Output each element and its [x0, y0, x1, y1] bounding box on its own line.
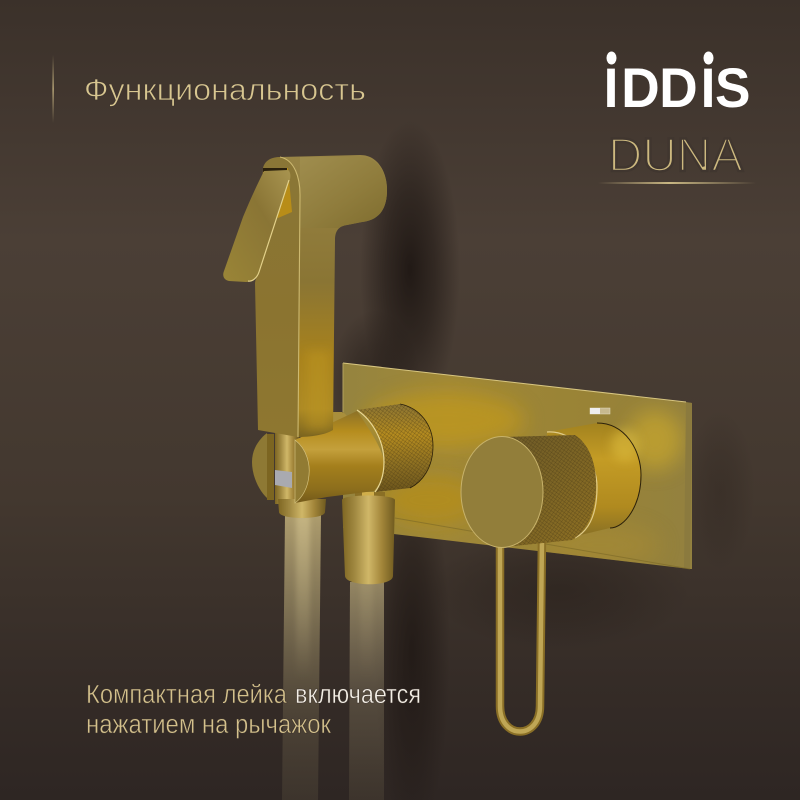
loop lever [500, 537, 542, 732]
shadows on wall [330, 120, 755, 800]
divider line left of heading [52, 55, 54, 123]
caption: включается [295, 681, 421, 709]
silver band [275, 470, 292, 488]
handset [223, 150, 395, 437]
holder body [295, 411, 384, 503]
product name: DUNA: DUNA [608, 128, 744, 181]
caption: нажатием на рычажок [86, 711, 332, 739]
handset side and head [280, 150, 395, 437]
holder knurled collar [357, 404, 433, 492]
right half disc [295, 440, 309, 503]
knob end disc [461, 436, 543, 548]
hose nut: left [278, 499, 326, 518]
holder stem [275, 432, 299, 504]
caption [86, 681, 421, 739]
mixer base cylinder [547, 423, 641, 543]
holder ring behind handset [333, 412, 350, 432]
left half disc [252, 433, 268, 499]
hose: right [349, 582, 384, 800]
handset front face [255, 157, 300, 437]
hose: left [282, 515, 321, 800]
trigger lever [223, 170, 290, 282]
wall plate [343, 363, 692, 569]
mixer knob with knurled grip [461, 435, 596, 548]
logo: IDDIS: IDDIS [604, 57, 750, 119]
trigger recess [262, 168, 292, 218]
heading: Функциональность [84, 73, 366, 107]
handset holder [252, 404, 433, 518]
indicator mark on plate [590, 408, 610, 414]
caption: Компактная лейка [86, 681, 288, 709]
hose nut: right [342, 492, 395, 584]
underline below product name [598, 182, 756, 184]
